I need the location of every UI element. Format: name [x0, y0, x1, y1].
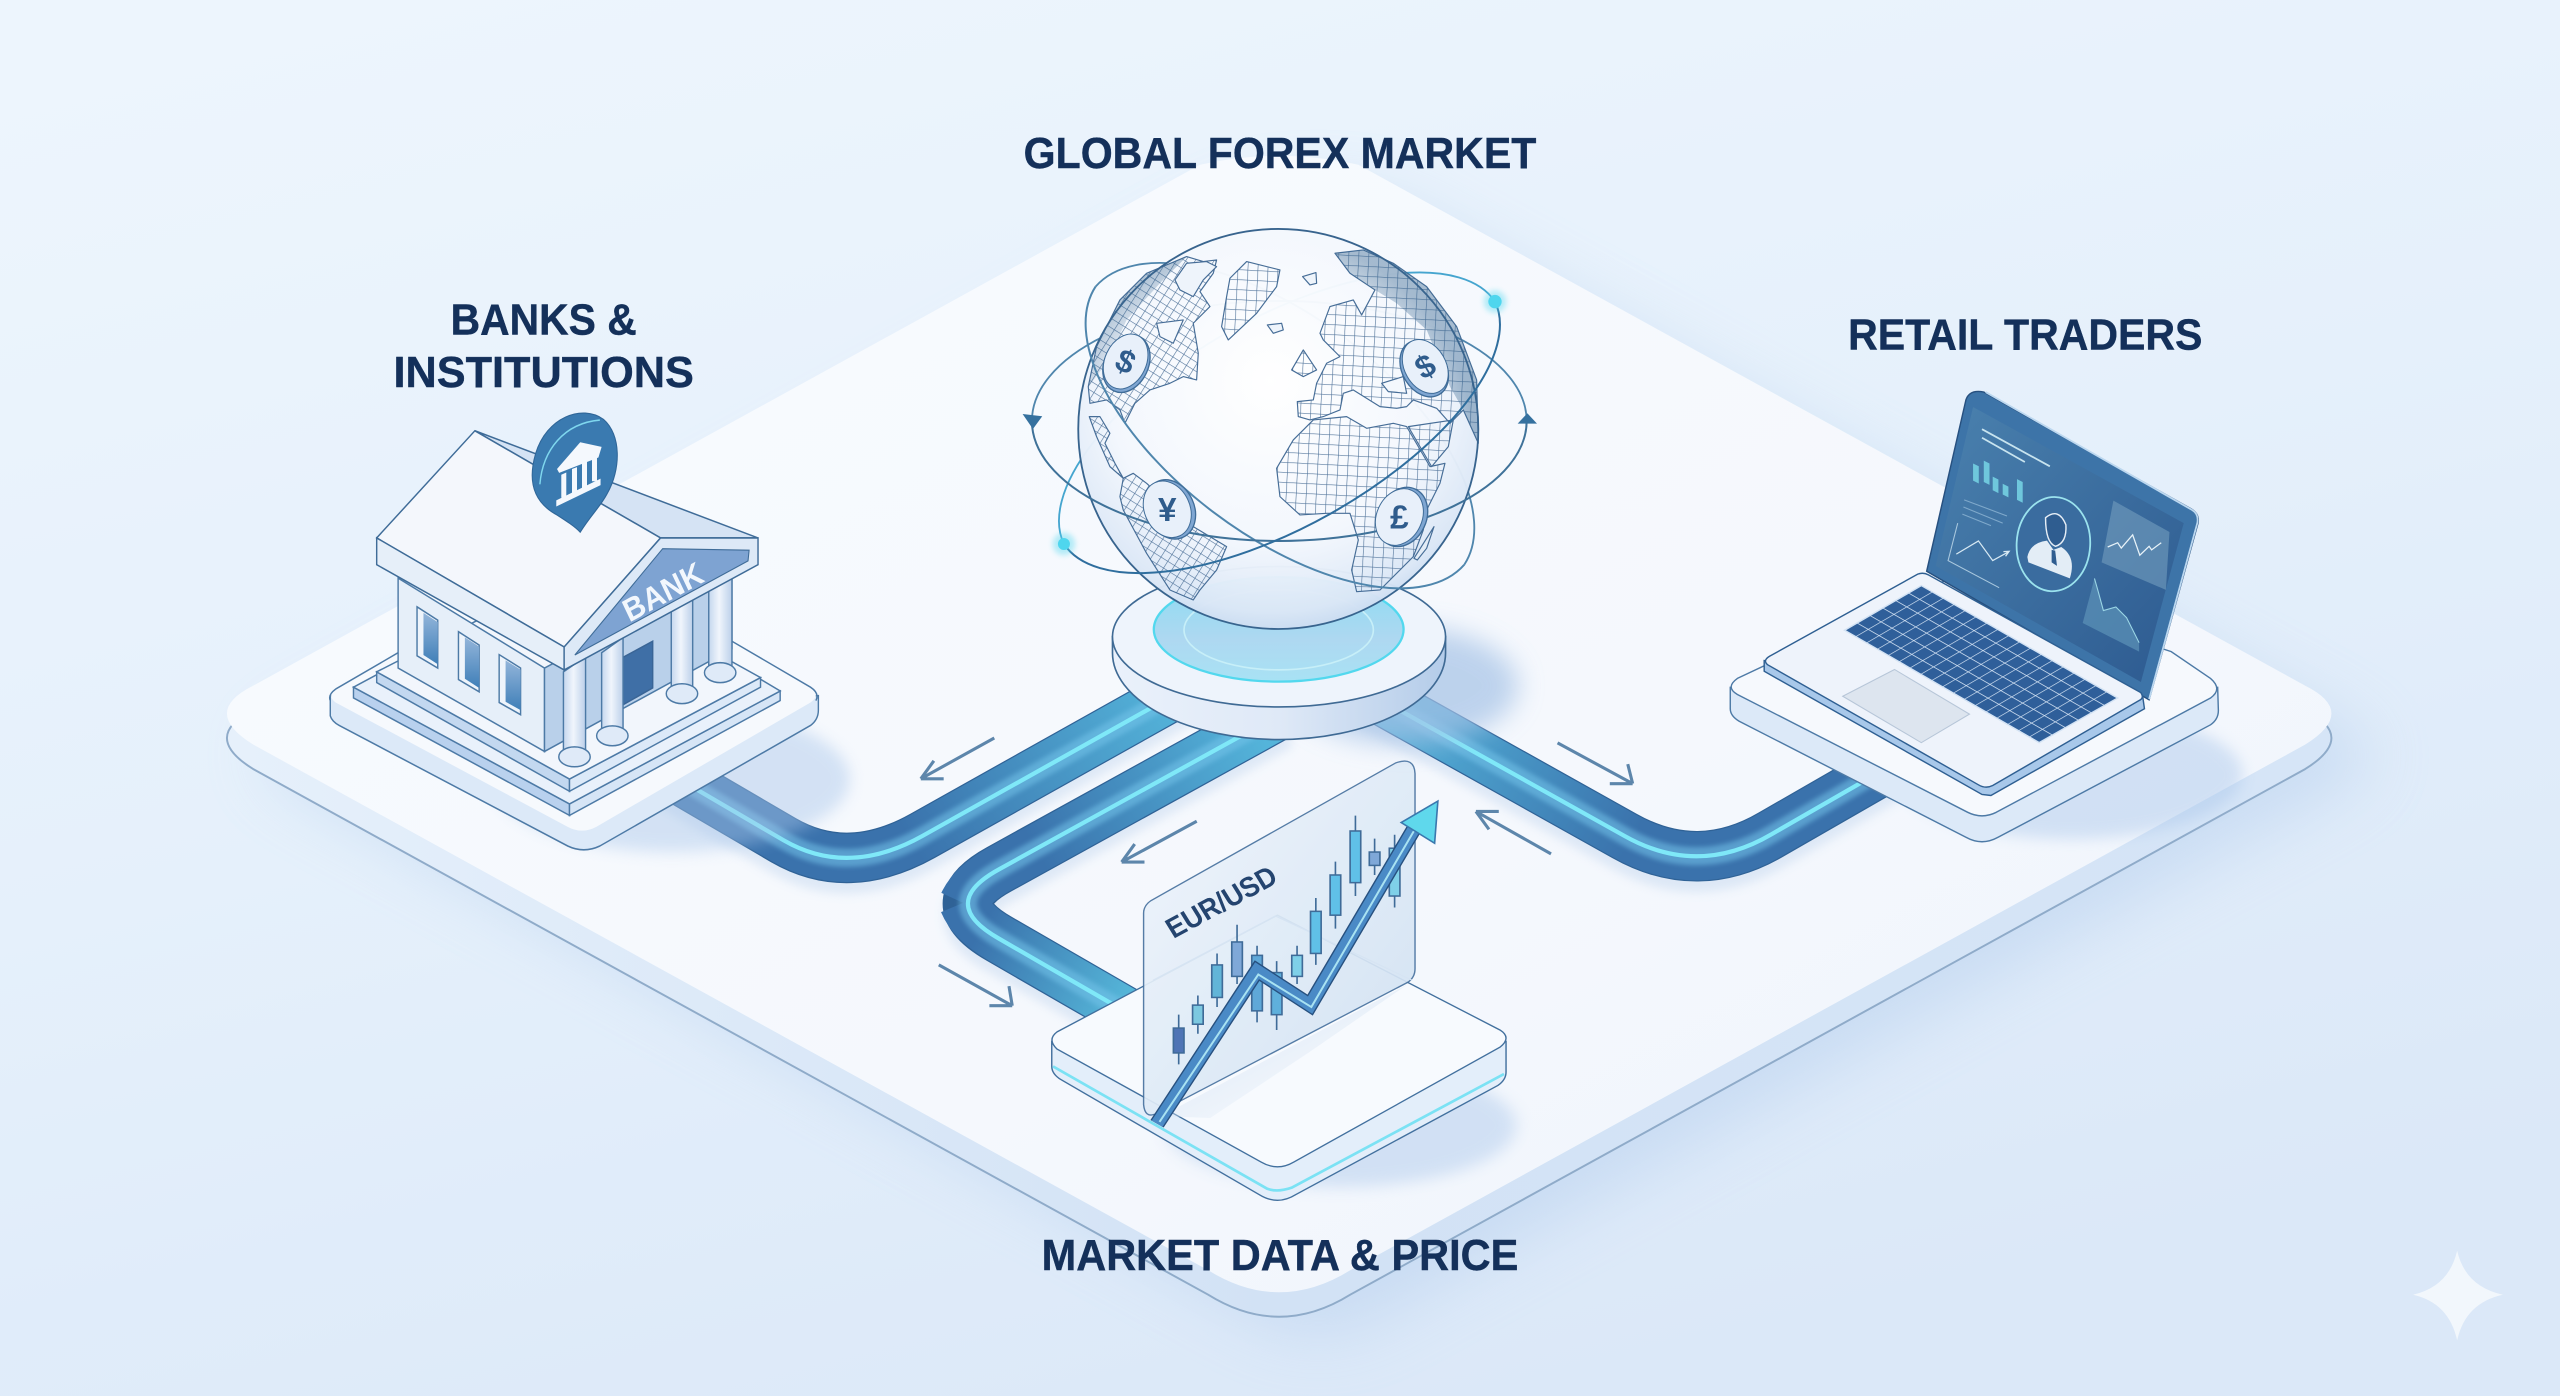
laptop trackpad [1843, 669, 1969, 743]
pipe: market data connection [963, 713, 1282, 1024]
bank walls and windows [398, 569, 732, 751]
icon: bank on platform [330, 413, 850, 852]
candlesticks [1173, 816, 1400, 1064]
panel: isometric base platform [227, 156, 2371, 1333]
arrow: flow toward market data [939, 965, 1012, 1006]
orbit front arcs [1032, 287, 1527, 588]
arrow: flow toward banks [921, 738, 994, 779]
arrow: flow toward retail [1558, 743, 1633, 784]
currency coin: dollar right: $ [1409, 346, 1442, 386]
currency coin: pound [1366, 478, 1437, 555]
chart panel [1144, 761, 1415, 1118]
laptop deck [1764, 573, 2144, 796]
orbit direction arrowheads [1023, 413, 1537, 429]
heading: market data and price: MARKET DATA & PRICE [1042, 1232, 1518, 1280]
icon: bank location pin [532, 413, 617, 532]
icon: sparkle watermark [2413, 1251, 2503, 1340]
arrow: flow from market data [1122, 821, 1197, 862]
chart platform [1052, 915, 1516, 1200]
heading: retail traders: RETAIL TRADERS [1848, 311, 2202, 359]
currency coin: yen [1134, 471, 1205, 548]
icon: market chart on platform [1052, 761, 1516, 1200]
laptop keyboard [1845, 586, 2118, 743]
currency coin: yen: ¥ [1158, 492, 1177, 529]
orbit back arcs [1032, 263, 1527, 565]
currency coin: dollar left: $ [1110, 341, 1141, 382]
arrow: flow from market data to retail [1476, 811, 1551, 854]
currency coin: dollar left [1094, 327, 1159, 400]
pedestal under globe [1112, 567, 1518, 744]
laptop base plate [1730, 578, 2243, 842]
rising trend arrow [1157, 801, 1438, 1124]
currency coin: dollar right [1390, 331, 1459, 406]
continents [1088, 250, 1478, 600]
globe sphere [1078, 229, 1478, 629]
bank base plate [330, 549, 850, 852]
orbit glowing nodes [1053, 290, 1506, 555]
pipe: banks connection [645, 680, 1200, 869]
bank columns [559, 576, 736, 767]
bank roof [377, 431, 758, 670]
globe limb outline [1078, 229, 1478, 629]
heading: global forex market: GLOBAL FOREX MARKET [1024, 130, 1536, 178]
icon: laptop on platform [1730, 391, 2243, 842]
heading: banks and institutions [393, 297, 694, 397]
heading: banks and institutions: BANKS & [451, 297, 637, 345]
bank sign text: BANK [617, 555, 709, 629]
chart pair label: EUR/USD [1161, 861, 1283, 945]
bank steps [353, 569, 780, 815]
icon: globe [1023, 229, 1537, 629]
heading: banks and institutions: INSTITUTIONS [393, 349, 694, 397]
pipe: retail traders connection [1347, 681, 1902, 868]
currency coin: pound: £ [1390, 500, 1409, 537]
laptop lid [1927, 391, 2198, 700]
